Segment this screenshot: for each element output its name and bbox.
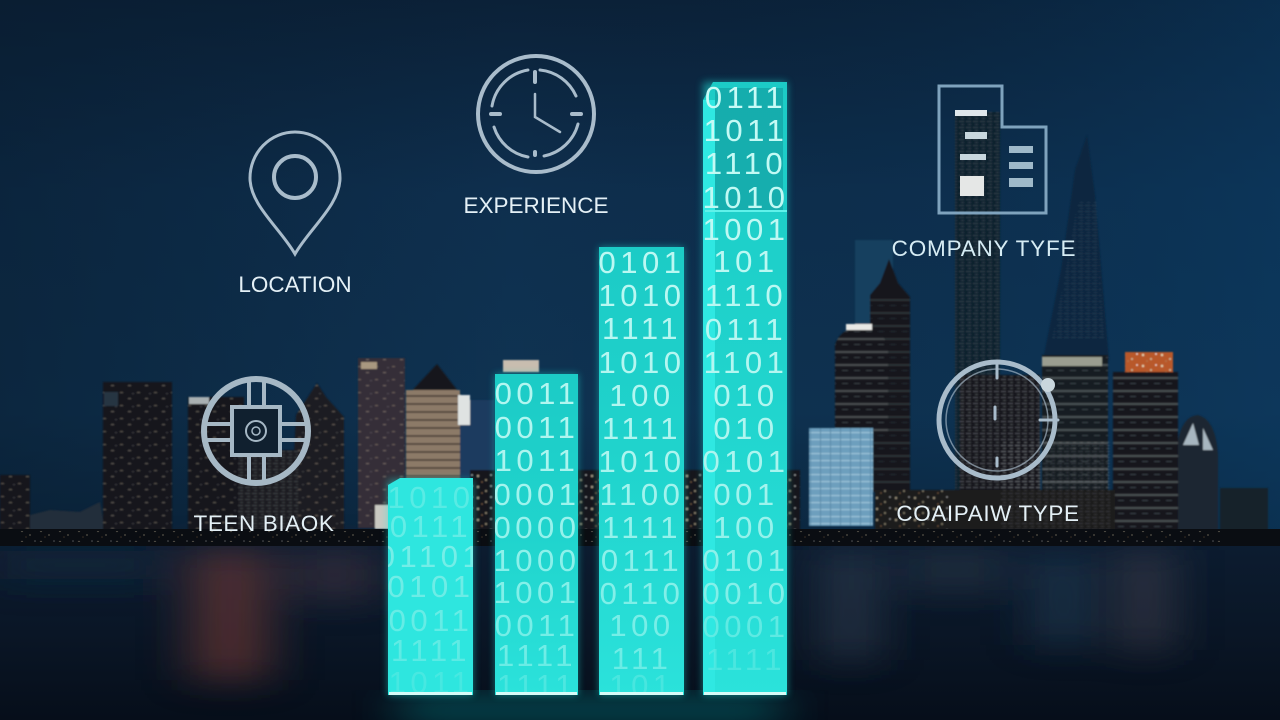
label: company type lower: COAIPAIW TYPE [896,501,1080,526]
bar 3: 101 [609,668,675,703]
bar 1: 1111 [391,633,471,668]
bar 3: 1010 [599,278,685,313]
bar 4: 1011 [704,113,788,148]
bar 4: 1001 [703,212,789,247]
bar 1: 1010 [388,480,474,515]
bar chart glow [400,700,780,720]
bar 3: 100 [609,608,675,643]
bar 4: 0101 [703,543,789,578]
bar 3 [599,245,685,703]
label: experience: EXPERIENCE [463,193,609,218]
bar 4: 101 [713,244,779,279]
bar 4: 010 [713,378,779,413]
icon: location pin [250,132,340,254]
bar 4: 1010 [703,180,789,215]
bar 1: 1011 [389,665,473,700]
skyline: left buildings [0,358,800,540]
icon: technology circuit [204,379,308,483]
label: company type upper: COMPANY TYFE [892,236,1076,261]
water with reflections [0,545,1280,720]
bar 4: 1101 [704,345,788,380]
skyline: right buildings [809,112,1268,536]
bar 2 [494,374,580,703]
bar 4: 0111 [705,312,787,347]
bar 3: 1111 [602,411,682,446]
label: teen black: TEEN BIAOK [193,511,335,536]
bar 4 [703,80,789,695]
bar 3: 0110 [600,576,684,611]
bar 2: 1011 [495,443,579,478]
bar 1: 0101 [388,569,474,604]
bar 4: 010 [713,411,779,446]
bar 1: 0011 [389,603,473,638]
icon: circular ring [939,362,1058,478]
bar 4: 100 [713,510,779,545]
background sky [0,0,1280,550]
bar 2: 0011 [495,608,579,643]
label: location: LOCATION [238,272,352,297]
bar 3: 100 [609,378,675,413]
bar 2: 0011 [495,410,579,445]
bar 3: 1111 [602,510,682,545]
bar 3: 1010 [599,345,685,380]
bar 2: 0000 [494,510,580,545]
icon: clock [478,56,594,172]
bar 4: 0111 [705,80,787,115]
bar 4: 0101 [703,444,789,479]
bar 4: 0010 [703,576,789,611]
bar 3: 0111 [601,543,683,578]
bar 3: 1111 [602,311,682,346]
bar 3: 111 [612,641,672,676]
icon: company building [939,86,1046,213]
bar 2: 1001 [494,575,580,610]
bar 1: 0111 [390,509,472,544]
bar 2: 1000 [494,543,580,578]
bar chart: binary bars [378,80,789,703]
bar 4: 1111 [706,642,786,677]
bar 3: 1010 [599,444,685,479]
bar 2: 1111 [497,668,577,703]
bar 2: 0011 [495,376,579,411]
bar 1: 01101 [378,539,484,574]
bar 3: 0101 [599,245,685,280]
bar 4: 1110 [705,278,787,313]
bar 4: 1110 [705,146,787,181]
bar 4: 001 [713,477,779,512]
bar 2: 1111 [497,638,577,673]
bar 1 [378,478,484,700]
shoreline [0,529,1280,546]
bar 2: 0001 [494,477,580,512]
bar 4: 0001 [703,609,789,644]
bar 3: 1100 [600,477,684,512]
